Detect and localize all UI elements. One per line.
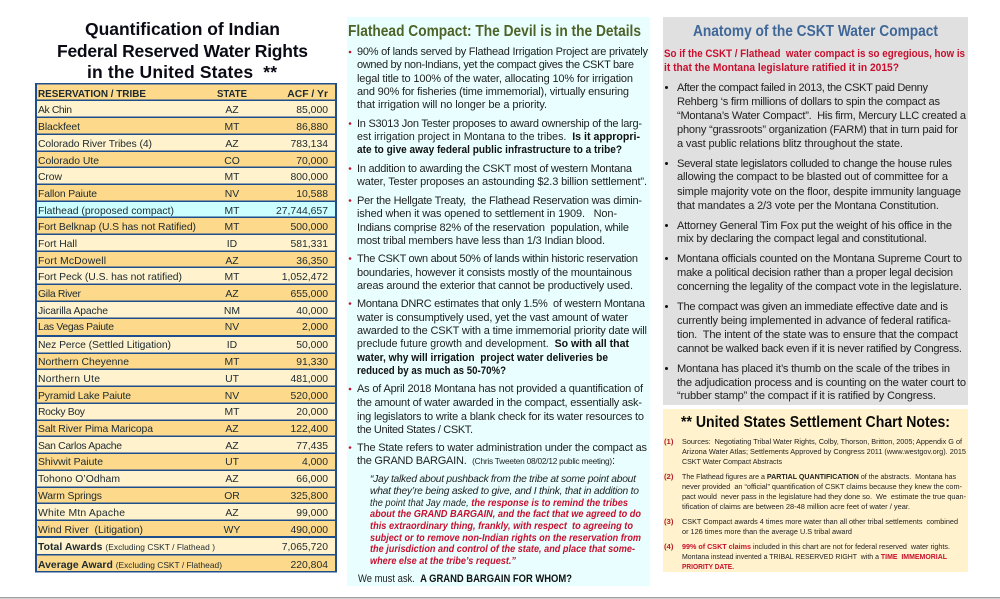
row: Ak Chin: 85,000	[296, 105, 328, 116]
row: Colorado Ute: 70,000	[296, 156, 328, 167]
row: Fort Belknap	[37, 218, 335, 234]
row: Crow: 800,000	[290, 172, 328, 183]
row: Gila River: AZ	[225, 289, 239, 300]
bullet: Supreme Court: concerning the legality of the compact vote in the legislature.	[677, 281, 962, 293]
bullet: land ownership	[349, 46, 648, 111]
row: Salt River Pima Maricopa: Salt River Pima Maricopa	[38, 424, 153, 435]
row: Blackfeet: 86,880	[296, 122, 328, 133]
note 4: PRIORITY DATE.	[682, 562, 734, 571]
row: Northern Ute	[37, 370, 335, 386]
row: average award: 220,804	[290, 560, 328, 571]
panel: Flathead Compact	[347, 17, 650, 586]
row: Fort Belknap: 500,000	[290, 222, 328, 233]
bullet: effective date: The compact was given an immediate effective date and is	[677, 301, 948, 313]
note 2	[664, 472, 966, 511]
note 3	[664, 517, 958, 536]
table header row	[37, 84, 335, 100]
row: total awards	[37, 538, 335, 554]
row: Rocky Boy: Rocky Boy	[38, 407, 86, 418]
row: Fort Hall: Fort Hall	[38, 239, 77, 250]
row: San Carlos Apache	[37, 437, 335, 452]
title: Federal Reserved Water Rights	[57, 41, 308, 61]
row: Pyramid Lake Paiute: Pyramid Lake Paiute	[38, 391, 131, 402]
row: Gila River	[37, 285, 335, 300]
quote block: where else at the tribe’s request.”	[370, 556, 517, 567]
row: Fort Peck: 1,052,472	[282, 272, 328, 283]
row: Northern Ute: Northern Ute	[38, 374, 100, 385]
row: Colorado Ute: Colorado Ute	[38, 156, 99, 167]
row: Salt River Pima Maricopa: AZ	[225, 424, 239, 435]
row: Warm Springs: OR	[224, 491, 240, 502]
row: Shivwit Paiute: UT	[225, 457, 240, 468]
bullet: effective date: tion. The intent of the state was to ensure that the compact	[677, 329, 958, 341]
row: Jicarilla Apache	[37, 302, 335, 318]
row: Fort Belknap: MT	[224, 222, 240, 233]
bullet: house rules: allowing the compact to be blasted out of committee for a	[677, 171, 949, 183]
bullet: house rules	[665, 158, 961, 212]
bullet: Hellgate Treaty: Indians comprise 82% of the reservation population, while	[357, 222, 629, 234]
bullet: Montana DNRC	[349, 298, 647, 377]
row: Tohono O'Odham: Tohono O’Odham	[38, 474, 120, 485]
row: Tohono O'Odham	[37, 471, 335, 486]
bullet: Montana DNRC: water, why will irrigation project water deliveries be	[356, 352, 608, 364]
bullet: land share: areas around the exterior that cannot be productively used.	[357, 280, 633, 292]
row: Tohono O'Odham: AZ	[225, 474, 239, 485]
row: Fort McDowell: Fort McDowell	[38, 256, 106, 267]
bullet: Rehberg: a vast public relations blitz throughout the state.	[677, 138, 903, 150]
row: Jicarilla Apache: NM	[224, 306, 240, 317]
row: Ak Chin: AZ	[225, 105, 239, 116]
row: Fort Belknap: Fort Belknap (U.S has not Ratified)	[38, 222, 196, 233]
note 1: (1)	[664, 437, 674, 446]
title: Quantification of Indian	[85, 19, 280, 39]
row: Colorado River Tribes: AZ	[225, 139, 239, 150]
bullet: Montana DNRC: preclude future growth and development. So with all that	[357, 338, 629, 350]
row: average award: Average Award (Excluding CSKT / Flathead)	[38, 560, 222, 571]
row: Gila River: Gila River	[38, 289, 82, 300]
bullet: Hellgate Treaty: most tribal members have less than 1/3 Indian blood.	[357, 235, 605, 247]
row: White Mtn Apache: 99,000	[296, 508, 328, 519]
row: Blackfeet	[37, 118, 335, 134]
bullet: house rules: that mandates a 2/3 vote per the Montana Constitution.	[677, 200, 939, 212]
row: Shivwit Paiute	[37, 454, 335, 470]
row: Las Vegas Paiute: Las Vegas Paiute	[38, 322, 114, 333]
bullet: settlement: water, Tester proposes an astounding $2.3 billion settlement”.	[356, 176, 647, 188]
quote block: about the GRAND BARGAIN, and the fact that we agreed to do	[370, 509, 641, 520]
quote block: what they’re being asked to give, and I think, that in addition to	[370, 486, 639, 497]
bullet: land share	[349, 253, 638, 292]
row: Las Vegas Paiute: 2,000	[302, 322, 328, 333]
quote block: subject or to remove non-Indian rights on the reservation from	[370, 533, 641, 544]
bullet: land ownership: that irrigation will no longer be a priority.	[357, 99, 547, 111]
note 1: Arizona Water Atlas; Settlements Approved by Congress 2011 (www.westgov.org). 2015	[682, 447, 966, 456]
row: Colorado River Tribes	[37, 135, 335, 150]
row: Northern Cheyenne: 91,330	[296, 357, 328, 368]
title	[57, 19, 308, 82]
row: Ak Chin: Ak Chin	[38, 105, 72, 116]
bullet: Rehberg: After the compact failed in 2013, the CSKT paid Denny	[677, 82, 928, 94]
row: Fallon Paiute	[37, 185, 335, 200]
bullet: S3013: ate to give away federal public infrastructure to a tribe?	[357, 144, 622, 156]
quote block: the point that Jay made, the response is to remind the tribes	[370, 498, 628, 509]
red question: it that the Montana legislature ratified it in 2015?	[664, 62, 899, 74]
row: Nez Perce	[37, 337, 335, 352]
bullet: Montana DNRC: reduced by as much as 50-70%?	[357, 365, 506, 377]
bullet: Hellgate Treaty: ished when it was opened to settlement in 1909. Non-	[357, 208, 617, 220]
row: Fort Peck: MT	[224, 272, 240, 283]
row: Nez Perce: 50,000	[296, 340, 328, 351]
row: Northern Cheyenne: Northern Cheyenne	[38, 357, 129, 368]
bullet: land ownership: legal title to 100% of the water, allocating 10% for irrigation	[357, 73, 633, 85]
quote block: “Jay talked about pushback from the tribe at some point about	[370, 474, 637, 485]
bullet: S3013: In S3013 Jon Tester proposes to award ownership of the larg-	[357, 118, 642, 130]
note 3: or 126 times more than the average U.S tribal award	[682, 527, 852, 536]
row: Northern Cheyenne	[37, 354, 335, 368]
row: total awards: 7,065,720	[282, 542, 328, 553]
bullet: Montana DNRC: awarded to the CSKT with a time immemorial priority date will	[357, 325, 647, 337]
table header row: RESERVATION / TRIBE	[38, 89, 146, 100]
row: Nez Perce: ID	[227, 340, 237, 351]
note 2: tification of claims are between 28-48 million acre feet of water / year.	[682, 502, 910, 511]
bullet: Rehberg	[665, 82, 967, 150]
red question: So if the CSKT / Flathead water compact is so egregious, how is	[664, 48, 965, 60]
bullet: effective date: cannot be walked back even if it is never ratified by Congress.	[677, 343, 962, 355]
note 4: 99% of CSKT claims included in this chart are not for federal reserved water rights.	[682, 542, 950, 551]
row: Fort Peck: Fort Peck (U.S. has not ratified)	[38, 272, 182, 283]
row: Wind River: WY	[224, 525, 240, 536]
bullet: Montana DNRC: water is consumptively used, yet the vast amount of water	[356, 312, 628, 324]
bullet: Supreme Court: make a political decision rather than a proper legal decision	[677, 267, 953, 279]
row: Wind River	[37, 521, 335, 536]
row: Fallon Paiute: NV	[225, 189, 239, 200]
bullet: land share: The CSKT own about 50% of lands within historic reservation	[357, 253, 638, 265]
row: San Carlos Apache: 77,435	[296, 441, 328, 452]
row: Shivwit Paiute: 4,000	[302, 457, 328, 468]
bullet: S3013: est irrigation project in Montana to the tribes. Is it appropri-	[357, 131, 640, 143]
row: Colorado Ute: CO	[224, 156, 240, 167]
row: White Mtn Apache: AZ	[225, 508, 239, 519]
bullet: effective date: currently being implemented in advance of federal ratifica-	[677, 315, 951, 327]
note 3: (3)	[664, 517, 674, 526]
bullet: Supreme Court	[665, 253, 962, 293]
note 2: (2)	[664, 472, 674, 481]
bullet: Hellgate Treaty: Per the Hellgate Treaty, the Flathead Reservation was dimin-	[357, 195, 642, 207]
row: Northern Ute: 481,000	[290, 374, 328, 385]
row: Fallon Paiute: 10,588	[296, 189, 328, 200]
row: Colorado River Tribes: 783,134	[290, 139, 328, 150]
row: Northern Cheyenne: MT	[224, 357, 240, 368]
heading: notes: ** United States Settlement Chart Notes:	[681, 414, 950, 431]
row: San Carlos Apache: San Carlos Apache	[38, 441, 122, 452]
row: Flathead highlighted: Flathead (proposed compact)	[38, 206, 174, 217]
bullet: Attorney General: mix by declaring the compact legal and constitutional.	[677, 233, 927, 245]
note 1	[664, 437, 966, 466]
row: Warm Springs: Warm Springs	[38, 491, 102, 502]
row: Fort McDowell: 36,350	[296, 256, 328, 267]
note 4: Montana instead invented a TRIBAL RESERVED RIGHT with a TIME IMMEMORIAL	[682, 552, 947, 561]
row: Pyramid Lake Paiute	[37, 387, 335, 402]
heading: Anatomy: Anatomy of the CSKT Water Compact	[693, 23, 938, 40]
bullet: grand bargain	[349, 442, 648, 467]
bullet: S3013	[349, 118, 642, 156]
note 1: Sources: Negotiating Tribal Water Rights, Colby, Thorson, Britton, 2005; Appendix G of	[682, 437, 963, 446]
bullet: grand bargain: The State refers to water administration under the compact as	[357, 442, 648, 454]
row: Rocky Boy	[37, 404, 335, 420]
note 4	[664, 542, 950, 571]
quote block: the jurisdiction and control of the state, and place that some-	[370, 544, 635, 555]
bullet: house rules: Several state legislators colluded to change the house rules	[677, 158, 952, 170]
row: Blackfeet: Blackfeet	[38, 122, 80, 133]
row: average award	[37, 556, 335, 571]
bullet: April 2018: the United States / CSKT.	[357, 424, 473, 436]
bullet: settlement	[349, 163, 647, 188]
bullet: April 2018: As of April 2018 Montana has not provided a quantification of	[357, 383, 644, 395]
row: Crow: Crow	[38, 172, 62, 183]
row: Wind River: Wind River (Litigation)	[38, 525, 143, 536]
bullet: April 2018: ing legislators to write a blank check for its water resources to	[357, 411, 644, 423]
row: Pyramid Lake Paiute: 520,000	[290, 391, 328, 402]
note 2: The Flathead figures are a PARTIAL QUANTIFICATION of the abstracts. Montana has	[682, 472, 956, 481]
bullet: land ownership: owned by non-Indians, yet the compact gives the CSKT bare	[357, 59, 634, 71]
bullet: house rules: simple majority vote on the floor, despite immunity language	[677, 186, 961, 198]
title: in the United States **	[87, 62, 277, 82]
table header row: STATE	[217, 89, 247, 100]
note 4: (4)	[664, 542, 674, 551]
bullet: Attorney General: Attorney General Tim Fox put the weight of his office in the	[677, 220, 952, 232]
closing question: We must ask. A GRAND BARGAIN FOR WHOM?	[358, 573, 572, 585]
panel: Anatomy of the CSKT Water Compact	[663, 17, 968, 405]
row: Fallon Paiute: Fallon Paiute	[38, 189, 97, 200]
row: Pyramid Lake Paiute: NV	[225, 391, 239, 402]
row: San Carlos Apache: AZ	[225, 441, 239, 452]
bullet: thumb on the scale: “rubber stamp” the compact if it is ratified by Congress.	[677, 390, 936, 402]
row: Fort McDowell	[37, 252, 335, 267]
bullet: thumb on the scale: the adjudication process and is counting on the water court to	[677, 377, 966, 389]
bullet: thumb on the scale: Montana has placed it’s thumb on the scale of the tribes in	[677, 363, 950, 375]
bullet: land ownership: and 90% for fisheries (time immemorial), virtually ensuring	[357, 86, 629, 98]
row: Salt River Pima Maricopa	[37, 421, 335, 436]
row: Colorado Ute	[37, 152, 335, 167]
table header row: ACF / Yr	[287, 89, 328, 100]
bullet: grand bargain: the GRAND BARGAIN. (Chris Tweeten 08/02/12 public meeting):	[357, 455, 615, 467]
row: Fort Hall	[37, 235, 335, 250]
note 2: pact would never pass in the legislature had they done so. We estimate the true quan-	[682, 492, 966, 501]
bullet: land ownership: 90% of lands served by Flathead Irrigation Project are privately	[357, 46, 648, 58]
panel: settlement chart notes	[663, 409, 968, 572]
row: Las Vegas Paiute	[37, 319, 335, 335]
row: Jicarilla Apache: 40,000	[296, 306, 328, 317]
bullet: land share: boundaries, however it consists mostly of the mountainous	[357, 267, 632, 279]
row: Ak Chin	[37, 101, 335, 116]
note 2: never provided an “official” quantification of CSKT claims because they knew the com-	[682, 482, 962, 491]
row: Wind River: 490,000	[290, 525, 328, 536]
row: Gila River: 655,000	[290, 289, 328, 300]
row: Shivwit Paiute: Shivwit Paiute	[38, 457, 103, 468]
row: Fort Hall: 581,331	[290, 239, 328, 250]
row: Fort Peck	[37, 268, 335, 284]
heading: Flathead Compact: Flathead Compact: The Devil is in the Details	[348, 23, 641, 40]
row: Blackfeet: MT	[224, 122, 240, 133]
row: Jicarilla Apache: Jicarilla Apache	[38, 306, 108, 317]
row: Northern Ute: UT	[225, 374, 240, 385]
bullet: Attorney General	[665, 220, 952, 245]
bullet: April 2018: the amount of water awarded in the compact, essentially ask-	[357, 397, 642, 409]
row: Las Vegas Paiute: NV	[225, 322, 239, 333]
bullet: Rehberg: Rehberg ‘s firm millions of dollars to spin the compact as	[677, 96, 940, 108]
bullet: Rehberg: “Montana’s Water Compact”. His firm, Mercury LLC created a	[677, 110, 967, 122]
note 1: CSKT Water Compact Abstracts	[682, 457, 782, 466]
row: Crow: MT	[224, 172, 240, 183]
table: water rights by tribe	[35, 83, 337, 572]
bullet: effective date	[665, 301, 962, 355]
row: Crow	[37, 168, 335, 184]
red question	[664, 48, 965, 74]
row: White Mtn Apache: White Mtn Apache	[38, 508, 125, 519]
quote block: this extraordinary thing, frankly, with respect to agreeing to	[370, 521, 633, 532]
bullet: Montana DNRC: Montana DNRC estimates that only 1.5% of western Montana	[357, 298, 646, 310]
row: Warm Springs: 325,800	[290, 491, 328, 502]
bullet: Hellgate Treaty	[349, 195, 642, 247]
row: Tohono O'Odham: 66,000	[296, 474, 328, 485]
quote block	[370, 474, 641, 567]
row: Warm Springs	[37, 488, 335, 502]
row: Salt River Pima Maricopa: 122,400	[290, 424, 328, 435]
row: Rocky Boy: 20,000	[296, 407, 328, 418]
row: Fort Hall: ID	[227, 239, 237, 250]
row: Flathead highlighted: MT	[224, 206, 240, 217]
bullet: April 2018	[349, 383, 644, 436]
bullet: settlement: In addition to awarding the CSKT most of western Montana	[357, 163, 633, 175]
row: Rocky Boy: MT	[224, 407, 240, 418]
bullet: Supreme Court: Montana officials counted on the Montana Supreme Court to	[677, 253, 962, 265]
row: Colorado River Tribes: Colorado River Tribes (4)	[38, 139, 152, 150]
row: Flathead highlighted	[37, 202, 335, 217]
row: White Mtn Apache	[37, 504, 335, 520]
bullet: thumb on the scale	[665, 363, 966, 402]
row: Fort McDowell: AZ	[225, 256, 239, 267]
row: Nez Perce: Nez Perce (Settled Litigation)	[38, 340, 171, 351]
bullet: Rehberg: phony “grassroots” organization (FARM) that in turn paid for	[677, 124, 958, 136]
note 3: CSKT Compact awards 4 times more water than all other tribal settlements combined	[682, 517, 958, 526]
row: total awards: Total Awards (Excluding CSKT / Flathead )	[38, 542, 215, 553]
row: Flathead highlighted: 27,744,657	[276, 206, 328, 217]
